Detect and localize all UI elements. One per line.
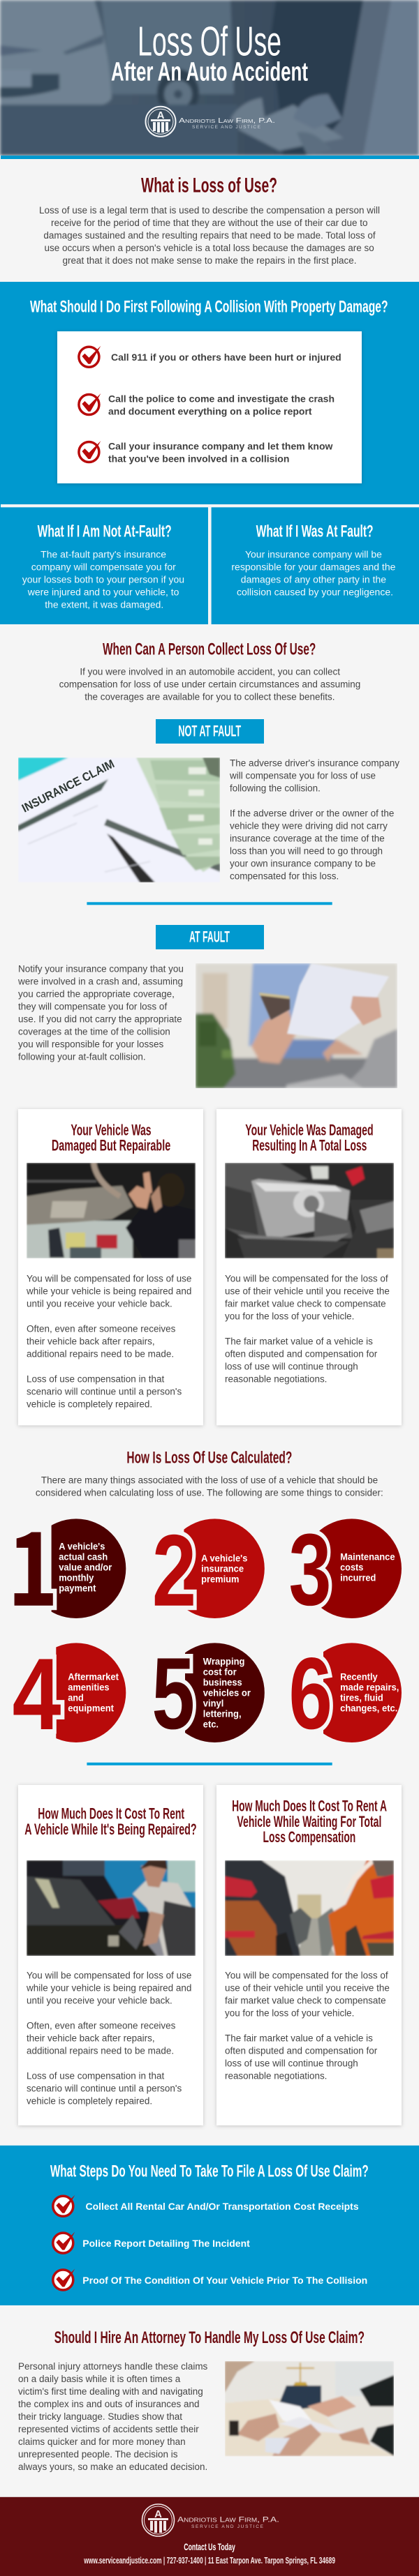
logo: Andriotis Law Firm: A	[154, 2508, 162, 2520]
panel: not at fault: What If I Am Not At-Fault?	[38, 522, 172, 541]
body text: scenario will continue until a person's	[27, 2083, 182, 2093]
body text: Loss of use compensation in that	[27, 1373, 165, 1384]
item 5: wrapping cost: cost for	[203, 1667, 237, 1678]
body text: fair market value check to compensate	[225, 1298, 386, 1309]
body text: scenario will continue until a person's	[27, 1386, 182, 1396]
text: at fault details: they will compensate you for loss of	[18, 1001, 167, 1011]
contact heading: Contact Us Today	[184, 2541, 235, 2552]
item 4: aftermarket amenities: equipment	[68, 1703, 114, 1714]
item 6: recent repairs: tires, fluid	[340, 1693, 383, 1703]
paragraph	[59, 667, 360, 702]
item 4: aftermarket amenities: and	[68, 1693, 84, 1703]
checklist card: Call the police to come and investigate the crash	[108, 393, 335, 404]
item 5: wrapping cost: vehicles or	[203, 1688, 251, 1698]
paragraph: unrepresented people. The decision is	[18, 2449, 178, 2460]
body text: vehicle is completely repaired.	[27, 2095, 152, 2106]
paragraph: always yours, so make an educated decision.	[18, 2462, 207, 2472]
badge: not at fault	[156, 719, 264, 744]
logo: Andriotis Law Firm: Andriotis Law Firm, P.A.	[177, 2515, 279, 2524]
panel: not at fault: your losses both to your person if you	[22, 574, 184, 585]
section heading: how is loss of use calculated: There are many things associated with the loss of use of a vehicle that should be	[41, 1475, 378, 1485]
icon: check 2	[79, 393, 101, 414]
text: at fault details: were involved in a crash and, assuming	[17, 976, 183, 986]
item 2: insurance premium	[155, 1519, 265, 1618]
item 3: maintenance costs: Maintenance	[340, 1552, 395, 1562]
body text: their vehicle back after repairs,	[27, 1336, 155, 1346]
text: not at fault details: insurance coverage at the time of the	[230, 833, 385, 843]
paragraph: victim's first time dealing with and navigating	[18, 2386, 203, 2397]
title: Loss Of Use	[138, 18, 281, 64]
item 4: aftermarket amenities	[14, 1643, 126, 1742]
body text: until you receive your vehicle back.	[27, 1298, 172, 1309]
item 6: recent repairs: Recently	[340, 1672, 378, 1682]
item 5: wrapping cost: etc.	[203, 1719, 219, 1730]
item 2: insurance premium: premium	[201, 1574, 239, 1585]
body text: fair market value check to compensate	[225, 1995, 386, 2005]
item 3: maintenance costs: costs	[340, 1562, 363, 1573]
item 4: aftermarket amenities: Aftermarket	[68, 1672, 119, 1682]
body text: The fair market value of a vehicle is	[225, 1336, 373, 1346]
body text: reasonable negotiations.	[225, 1373, 327, 1384]
checklist card: Call 911 if you or others have been hurt or injured	[111, 352, 341, 363]
body text: often disputed and compensation for	[225, 2045, 378, 2056]
paragraph	[18, 2361, 208, 2472]
paragraph: their tricky language. Studies show that	[18, 2411, 182, 2422]
body text: you for the loss of your vehicle.	[225, 2008, 354, 2018]
body text	[225, 1970, 390, 2081]
intro paragraph: great that it does not make sense to make the repairs in the first place.	[63, 255, 356, 266]
panel: not at fault: The at-fault party's insurance	[41, 549, 166, 559]
section heading: how is loss of use calculated: considered when calculating loss of use. The following are some things to consider:	[36, 1487, 383, 1498]
text: at fault details: you carried the appropriate coverage,	[18, 988, 175, 999]
badge: at fault	[156, 925, 264, 949]
body text: until you receive your vehicle back.	[27, 1995, 172, 2005]
body text: Loss of use compensation in that	[27, 2070, 165, 2081]
body text: you for the loss of your vehicle.	[225, 1311, 354, 1321]
item 1: actual cash value: 1	[7, 1489, 59, 1636]
text: not at fault details: The adverse driver's insurance company	[230, 758, 399, 768]
item 5: wrapping cost	[154, 1643, 265, 1742]
section: should I hire an attorney	[18, 2328, 394, 2472]
panel: not at fault	[22, 522, 184, 610]
item 6: recent repairs	[292, 1643, 402, 1742]
item 1: actual cash value: value and/or	[59, 1562, 112, 1573]
item 4: aftermarket amenities: 4	[13, 1637, 61, 1751]
heading: How Much Does It Cost To Rent	[38, 1805, 184, 1823]
item 5: wrapping cost: 5	[152, 1637, 195, 1751]
body text: reasonable negotiations.	[225, 2070, 327, 2081]
item 3: maintenance costs: incurred	[340, 1573, 376, 1583]
item 2: insurance premium: A vehicle's	[201, 1553, 247, 1564]
paragraph: the coverages are available for you to collect these benefits.	[84, 692, 335, 702]
panel: at fault: damages of any other party in the	[241, 574, 386, 585]
heading: Damaged But Repairable	[52, 1137, 170, 1154]
paragraph: claims quicker and for more money than	[18, 2436, 186, 2447]
text: at fault details: following your at-fault collision.	[18, 1051, 146, 1062]
body text: use of their vehicle until you receive the	[225, 1982, 390, 1993]
item 1: actual cash value: payment	[59, 1583, 96, 1594]
heading	[24, 1805, 197, 1838]
body text: additional repairs need to be made.	[27, 1348, 174, 1359]
logo: Andriotis Law Firm: A	[157, 110, 165, 121]
intro paragraph	[39, 205, 380, 266]
item 5: wrapping cost: lettering,	[203, 1709, 242, 1719]
item 5: wrapping cost: Wrapping	[203, 1657, 244, 1667]
card: repairable	[18, 1109, 203, 1425]
body text: You will be compensated for loss of use	[27, 1970, 191, 1980]
body text: use of their vehicle until you receive the	[225, 1286, 390, 1296]
photo: rows of rental cars	[225, 1860, 394, 1956]
text: at fault details	[17, 963, 184, 1062]
logo: Andriotis Law Firm: Andriotis Law Firm, P.A.	[179, 116, 275, 125]
checklist card: Call your insurance company and let them know	[108, 440, 333, 451]
panel: at fault: Your insurance company will be	[245, 549, 382, 559]
panel: first steps following a collision	[0, 282, 419, 624]
photo: mechanic under car	[27, 1163, 196, 1258]
photo: insurance claim form and money	[18, 757, 220, 882]
section: what is loss of use	[39, 174, 380, 266]
heading: A Vehicle While It's Being Repaired?	[24, 1821, 197, 1838]
panel: at fault	[231, 522, 395, 597]
panel: steps to file a claim: Police Report Detailing The Incident	[82, 2238, 250, 2249]
intro paragraph: damages sustained and the resulting repairs that need to be made. Total loss of	[43, 230, 376, 241]
item 2: insurance premium: insurance	[201, 1564, 244, 1574]
panel: at fault: responsible for your damages and the	[231, 562, 395, 572]
body text: their vehicle back after repairs,	[27, 2033, 155, 2043]
text: at fault details: Notify your insurance company that you	[18, 963, 184, 974]
text: not at fault details: If the adverse driver or the owner of the	[230, 808, 394, 818]
section heading: how is loss of use calculated	[36, 1449, 383, 1498]
item 5: wrapping cost: vinyl	[203, 1698, 223, 1709]
paragraph: Personal injury attorneys handle these claims	[18, 2361, 208, 2372]
body text: while your vehicle is being repaired and	[26, 1286, 191, 1296]
item 1: actual cash value	[14, 1519, 126, 1618]
body text: You will be compensated for the loss of	[225, 1273, 388, 1283]
card: total loss	[216, 1109, 402, 1425]
text: not at fault details	[229, 758, 399, 881]
body text: The fair market value of a vehicle is	[225, 2033, 373, 2043]
paragraph: represented victims of accidents settle their	[18, 2424, 199, 2434]
icon: check 3	[79, 441, 101, 462]
checklist card	[57, 331, 362, 483]
panel: at fault: collision caused by your negligence.	[237, 587, 393, 597]
body text: while your vehicle is being repaired and	[26, 1982, 191, 1993]
paragraph: on a daily basis while it is often times a	[18, 2374, 181, 2384]
text: not at fault details: compensated for this loss.	[230, 871, 339, 881]
text: not at fault details: your own insurance company to be	[230, 858, 376, 868]
body text	[225, 1273, 390, 1384]
header photo: car and insurance agent	[0, 0, 419, 156]
text: at fault details: you will responsible for your losses	[18, 1039, 163, 1049]
photo: crashed car headlight	[225, 1163, 394, 1258]
photo: insurance claim form and money: INSURANCE CLAIM	[20, 757, 117, 815]
text: at fault details: use. If you did not carry the appropriate	[18, 1014, 182, 1024]
body text: loss of use will continue through	[225, 1361, 358, 1371]
panel: not at fault: the extent, it was damaged.	[45, 599, 163, 610]
icon: check 1	[53, 2195, 75, 2216]
icon: check 2	[53, 2232, 75, 2253]
checklist card: and document everything on a police report	[108, 405, 312, 416]
card: rental while being repaired	[18, 1785, 203, 2125]
photo: person with phone and letter	[196, 963, 397, 1088]
item 1: actual cash value: actual cash	[59, 1552, 108, 1562]
panel: not at fault: were injured and to your vehicle, to	[27, 587, 179, 597]
heading: Your Vehicle Was	[71, 1122, 152, 1139]
heading: Loss Compensation	[263, 1828, 355, 1846]
item 1: actual cash value: monthly	[59, 1573, 94, 1583]
badge: not at fault: NOT AT FAULT	[178, 723, 242, 740]
item 1: actual cash value: A vehicle's	[59, 1542, 105, 1552]
paragraph: If you were involved in an automobile accident, you can collect	[80, 667, 340, 677]
logo: Andriotis Law Firm: SERVICE AND JUSTICE	[192, 125, 261, 130]
icon: check 3	[53, 2268, 75, 2290]
paragraph: compensation for loss of use under certain circumstances and assuming	[59, 679, 360, 690]
logo: Andriotis Law Firm: SERVICE AND JUSTICE	[191, 2524, 264, 2529]
body text	[26, 1970, 191, 2106]
body text: additional repairs need to be made.	[27, 2045, 174, 2056]
badge: at fault: AT FAULT	[189, 928, 230, 946]
body text: vehicle is completely repaired.	[27, 1399, 152, 1409]
body text	[26, 1273, 191, 1409]
body text: You will be compensated for the loss of	[225, 1970, 388, 1980]
section: when can a person collect	[59, 640, 360, 702]
title: After An Auto Accident	[111, 58, 308, 87]
body text: often disputed and compensation for	[225, 1348, 378, 1359]
intro paragraph: use occurs when a person's vehicle is a total loss because the damages are so	[45, 243, 374, 253]
item 3: maintenance costs: 3	[289, 1513, 331, 1627]
text: not at fault details: will compensate you for loss of use	[229, 770, 376, 781]
icon: check 1	[79, 346, 101, 367]
body text: You will be compensated for loss of use	[27, 1273, 191, 1283]
text: not at fault details: vehicle they were driving did not carry	[230, 820, 388, 831]
title	[111, 18, 308, 87]
item 6: recent repairs: made repairs,	[340, 1682, 399, 1693]
body text: Often, even after someone receives	[27, 2020, 176, 2031]
card: rental while waiting for total loss compensation	[216, 1785, 402, 2125]
item 5: wrapping cost: business	[203, 1678, 242, 1688]
heading	[52, 1122, 170, 1154]
panel: steps to file a claim	[0, 2146, 419, 2305]
body text: Often, even after someone receives	[27, 1323, 176, 1334]
item 6: recent repairs: 6	[288, 1636, 332, 1750]
panel: not at fault: company will compensate you for	[31, 562, 176, 572]
text: not at fault details: following the collision.	[230, 783, 321, 793]
logo: Andriotis Law Firm	[142, 2504, 279, 2536]
paragraph: the complex ins and outs of insurances and	[18, 2399, 200, 2409]
heading	[232, 1798, 387, 1846]
body text: loss of use will continue through	[225, 2058, 358, 2068]
logo: Andriotis Law Firm	[145, 107, 275, 137]
blue strip under header	[1, 156, 419, 159]
item 2: insurance premium: 2	[152, 1513, 196, 1627]
section heading: how is loss of use calculated: How Is Loss Of Use Calculated?	[126, 1449, 292, 1468]
footer	[0, 2497, 419, 2576]
panel: steps to file a claim: Proof Of The Condition Of Your Vehicle Prior To The Collision	[82, 2275, 367, 2286]
photo: mechanic working on engine	[27, 1860, 196, 1956]
item 4: aftermarket amenities: amenities	[68, 1682, 109, 1693]
photo: attorney handing over document	[225, 2361, 394, 2457]
panel: steps to file a claim: Collect All Rental Car And/Or Transportation Cost Receipts	[85, 2201, 359, 2212]
item 6: recent repairs: changes, etc.	[340, 1703, 397, 1714]
item 3: maintenance costs	[291, 1519, 402, 1618]
heading: What is Loss of Use?	[141, 174, 277, 197]
text: not at fault details: loss than you will need to go through	[230, 845, 383, 856]
intro paragraph: receive for the period of time that they are without the use of their car due to	[51, 218, 367, 228]
intro paragraph: Loss of use is a legal term that is used to describe the compensation a person will	[39, 205, 380, 216]
checklist card: that you've been involved in a collision	[108, 453, 289, 464]
text: at fault details: coverages at the time of the collision	[18, 1026, 170, 1037]
heading	[245, 1122, 374, 1154]
header banner	[0, 0, 419, 156]
